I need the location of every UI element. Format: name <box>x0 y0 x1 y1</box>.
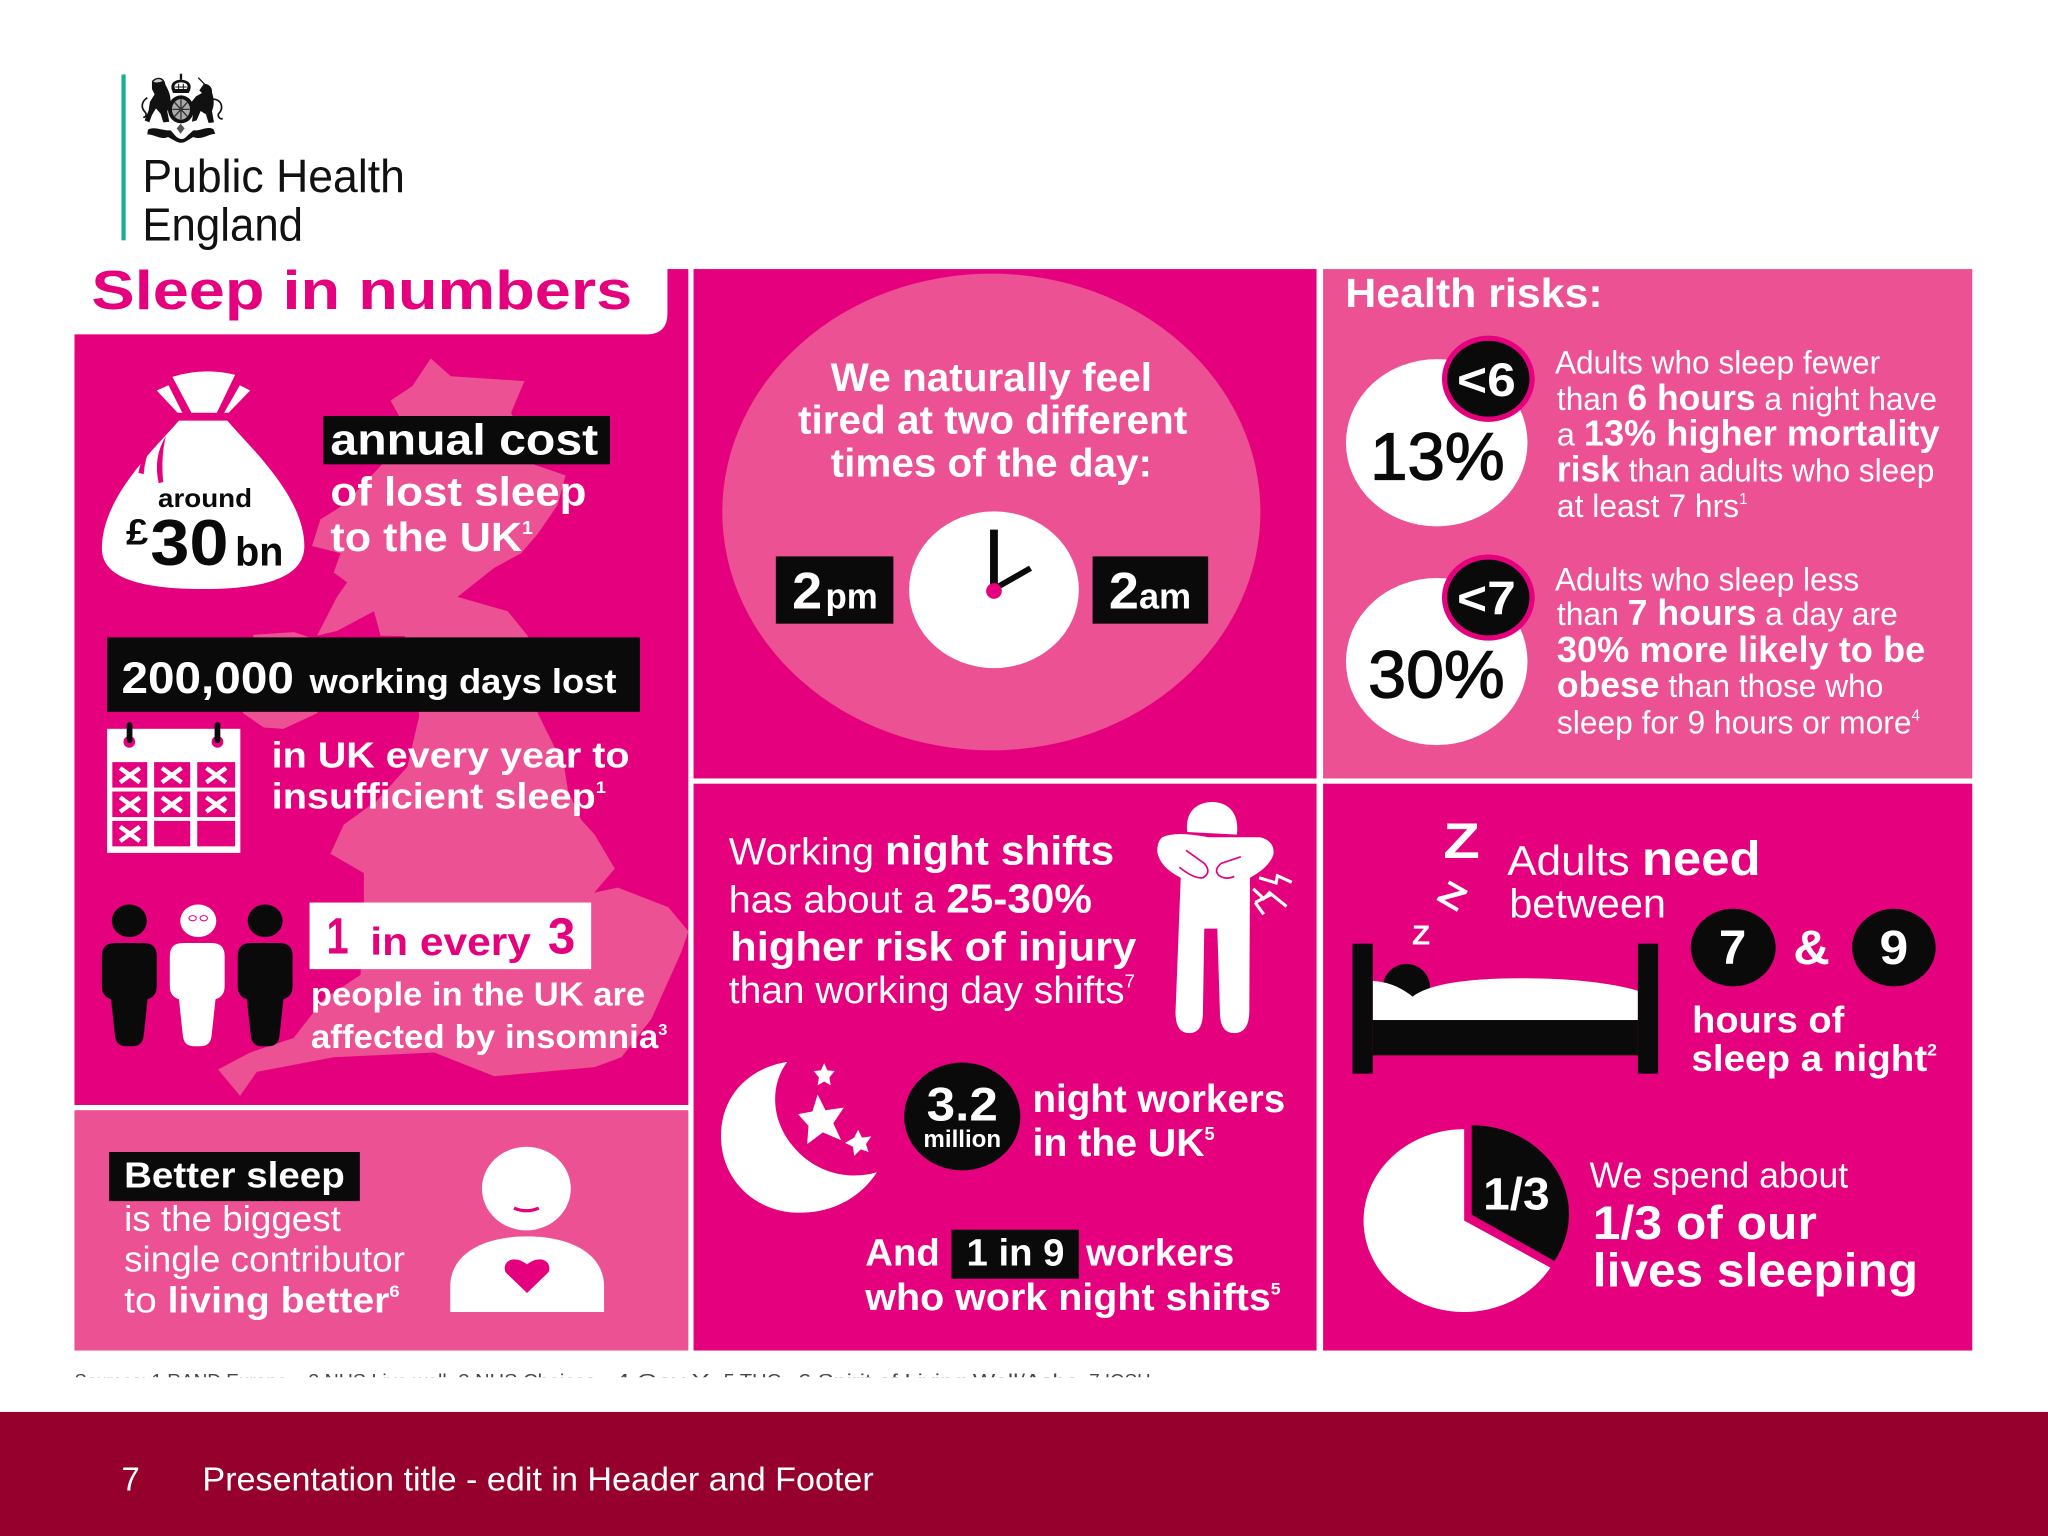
icon: royal crest <box>142 74 223 143</box>
stat: 30 percent: 30% <box>1368 638 1505 712</box>
icon: person in pain <box>1157 802 1292 1033</box>
stat: 13 percent: 13% <box>1370 420 1505 494</box>
annual cost text: of lost sleep <box>330 468 586 514</box>
better sleep text: to living better <box>124 1280 371 1321</box>
footer bar <box>0 1412 2048 1536</box>
text: mortality risk: risk than adults who sleep <box>1557 448 1934 489</box>
insomnia statistic: in every <box>370 921 531 964</box>
stat: 7 and 9 hours: hours of <box>1692 998 1845 1040</box>
clock caption: We naturally feel <box>831 356 1152 400</box>
text: adults need: between <box>1509 881 1666 927</box>
insufficient sleep text: in UK every year to <box>272 734 630 775</box>
heading: Health risks: <box>1345 270 1603 316</box>
stat: 1 in 9 workers: workers <box>1085 1233 1234 1275</box>
icon: sleeping z letters: Z <box>1431 873 1473 919</box>
panel: health risks <box>1323 269 1972 778</box>
text: injury risk: has about a 25-30% <box>729 875 1092 921</box>
working days lost banner <box>107 637 640 712</box>
icon: moon and stars <box>721 1062 877 1213</box>
better sleep text: is the biggest <box>124 1198 341 1239</box>
icon: money bag: around <box>158 483 252 513</box>
stat: night workers: 5 <box>1205 1123 1215 1144</box>
text: mortality risk: at least 7 hrs <box>1557 487 1744 524</box>
stat: 1 in 9 workers: who work night shifts <box>865 1277 1254 1319</box>
icon: money bag: 30 <box>150 506 229 579</box>
2am label <box>1093 556 1208 624</box>
text: lives sleeping: lives sleeping <box>1593 1244 1918 1297</box>
text: mortality risk <box>1555 344 1940 524</box>
better sleep text <box>109 1152 405 1321</box>
icon: clock <box>909 511 1079 668</box>
panel: better sleep <box>74 1110 688 1351</box>
text: injury risk: 7 <box>1125 970 1135 991</box>
text: lives sleeping: 1/3 of our <box>1593 1196 1817 1249</box>
icon: money bag <box>102 371 304 589</box>
text: obesity risk: 4 <box>1912 707 1920 724</box>
better sleep text: Better sleep <box>124 1154 345 1195</box>
stat: 7 and 9 hours <box>1691 909 1937 1079</box>
clock caption: times of the day: <box>831 442 1152 486</box>
insufficient sleep text <box>272 734 630 816</box>
2am label: am <box>1139 576 1191 617</box>
stat: 30 percent: <7 <box>1457 572 1516 625</box>
stat: 1 in 9 workers: 5 <box>1271 1279 1281 1298</box>
logo wordmark: Public Health <box>142 150 405 202</box>
stat: 1 in 9 workers <box>864 1230 1281 1319</box>
text: lives sleeping: We spend about <box>1590 1154 1848 1195</box>
stat: night workers: 3.2 <box>927 1078 998 1131</box>
pie chart: one third of life <box>1364 1125 1569 1312</box>
insomnia statistic: 1 <box>327 907 349 964</box>
stat: 1 in 9 workers: And <box>865 1233 940 1275</box>
stat: 7 and 9 hours: 9 <box>1880 921 1908 975</box>
icon: sleeping z letters: Z <box>1443 813 1480 869</box>
insomnia statistic: people in the UK are <box>311 977 645 1014</box>
sources line, clipped: 5 TUC <box>724 1370 781 1391</box>
text: mortality risk: than 6 hours a night have <box>1557 377 1937 418</box>
footer bar: 7 <box>121 1461 140 1498</box>
panel: tiredness clock <box>694 269 1317 778</box>
icon: three people <box>102 904 293 1046</box>
working days lost banner: working days lost <box>308 663 616 701</box>
icon: person with heart <box>450 1147 604 1312</box>
text: obesity risk: sleep for 9 hours or more <box>1557 703 1922 740</box>
icon: money bag: £ <box>126 512 148 553</box>
icon: money bag: bn <box>235 529 283 575</box>
icon: sleeping z letters: Z <box>1412 919 1430 950</box>
stat: 7 and 9 hours: 7 <box>1719 921 1746 975</box>
heading: Sleep in numbers <box>91 259 632 321</box>
panel: sleep need <box>1323 784 1972 1351</box>
annual cost text: 1 <box>522 517 533 538</box>
insomnia statistic: 3 <box>548 907 575 964</box>
text: obesity risk: 30% more likely to be <box>1557 629 1925 670</box>
text: lives sleeping <box>1590 1154 1918 1297</box>
icon: sleeping z letters <box>1412 813 1480 950</box>
sources line, clipped <box>76 1374 1150 1378</box>
working days lost banner: 200,000 <box>121 654 294 703</box>
stat: night workers: in the UK <box>1032 1122 1204 1165</box>
stat: 1 in 9 workers: 1 in 9 <box>967 1233 1064 1275</box>
better sleep text: 6 <box>389 1282 400 1301</box>
stat: 7 and 9 hours: sleep a night <box>1691 1037 1919 1079</box>
sources line, clipped: 3 NHS Choices <box>458 1370 596 1391</box>
clock caption <box>798 356 1187 486</box>
text: mortality risk: a 13% higher mortality <box>1557 412 1940 453</box>
2pm label: 2 <box>792 563 822 621</box>
annual cost text: to the UK <box>330 514 510 560</box>
stat: 7 and 9 hours: & <box>1793 921 1830 975</box>
2am label: 2 <box>1109 563 1139 621</box>
panel: sleep in numbers <box>52 259 688 1105</box>
stat: 13 percent <box>1346 338 1532 526</box>
text: injury risk <box>729 828 1136 1012</box>
text: adults need: Adults need <box>1507 832 1761 886</box>
text: injury risk: higher risk of injury <box>730 924 1136 970</box>
text: obesity risk: obese than those who <box>1557 664 1883 705</box>
logo wordmark: England <box>142 198 303 250</box>
insomnia statistic: 3 <box>658 1022 668 1039</box>
text: injury risk: Working night shifts <box>729 828 1114 874</box>
text: mortality risk: 1 <box>1739 491 1748 508</box>
sources line, clipped: 1 RAND Europe <box>152 1370 287 1391</box>
sources line, clipped: 4 Gov Y <box>615 1370 709 1391</box>
text: obesity risk: than 7 hours a day are <box>1557 592 1898 633</box>
insomnia statistic: affected by insomnia <box>311 1019 642 1056</box>
clock caption: tired at two different <box>798 399 1187 443</box>
stat: night workers: night workers <box>1032 1078 1285 1121</box>
text: obesity risk: Adults who sleep less <box>1555 560 1859 597</box>
icon: bed <box>1352 944 1658 1074</box>
insufficient sleep text: insufficient sleep <box>272 775 570 816</box>
annual cost text <box>323 416 610 560</box>
stat: 7 and 9 hours: 2 <box>1927 1040 1937 1059</box>
sources line, clipped: Sources: <box>74 1370 146 1391</box>
better sleep text: single contributor <box>124 1239 405 1280</box>
stat: 30 percent <box>1346 557 1532 745</box>
text: injury risk: than working day shifts <box>729 970 1114 1012</box>
text: obesity risk <box>1555 560 1925 740</box>
insomnia statistic <box>310 903 668 1056</box>
sources line, clipped: 7 IOSH <box>1089 1370 1151 1391</box>
2pm label: pm <box>825 576 878 617</box>
logo wordmark <box>142 150 405 250</box>
white title tab <box>52 261 667 353</box>
pie chart: one third of life: 1/3 <box>1483 1168 1550 1219</box>
map of the UK <box>218 358 688 1096</box>
insufficient sleep text: 1 <box>596 778 606 797</box>
footer bar: Presentation title - edit in Header and Footer <box>202 1461 874 1498</box>
logo: Public Health England <box>121 74 405 250</box>
stat: 13 percent: <6 <box>1457 353 1516 406</box>
sources line, clipped: 2 NHS Live well <box>308 1370 447 1391</box>
annual cost text: annual cost <box>330 417 598 465</box>
stat: night workers <box>904 1063 1285 1170</box>
panel: night shifts <box>694 784 1317 1351</box>
text: adults need <box>1507 832 1761 927</box>
text: mortality risk: Adults who sleep fewer <box>1555 344 1880 381</box>
sources line, clipped: 6 Spirit of Living Well/Ashe <box>798 1370 1079 1391</box>
icon: calendar <box>107 722 240 853</box>
2pm label <box>776 556 893 624</box>
stat: night workers: million <box>923 1126 1001 1153</box>
